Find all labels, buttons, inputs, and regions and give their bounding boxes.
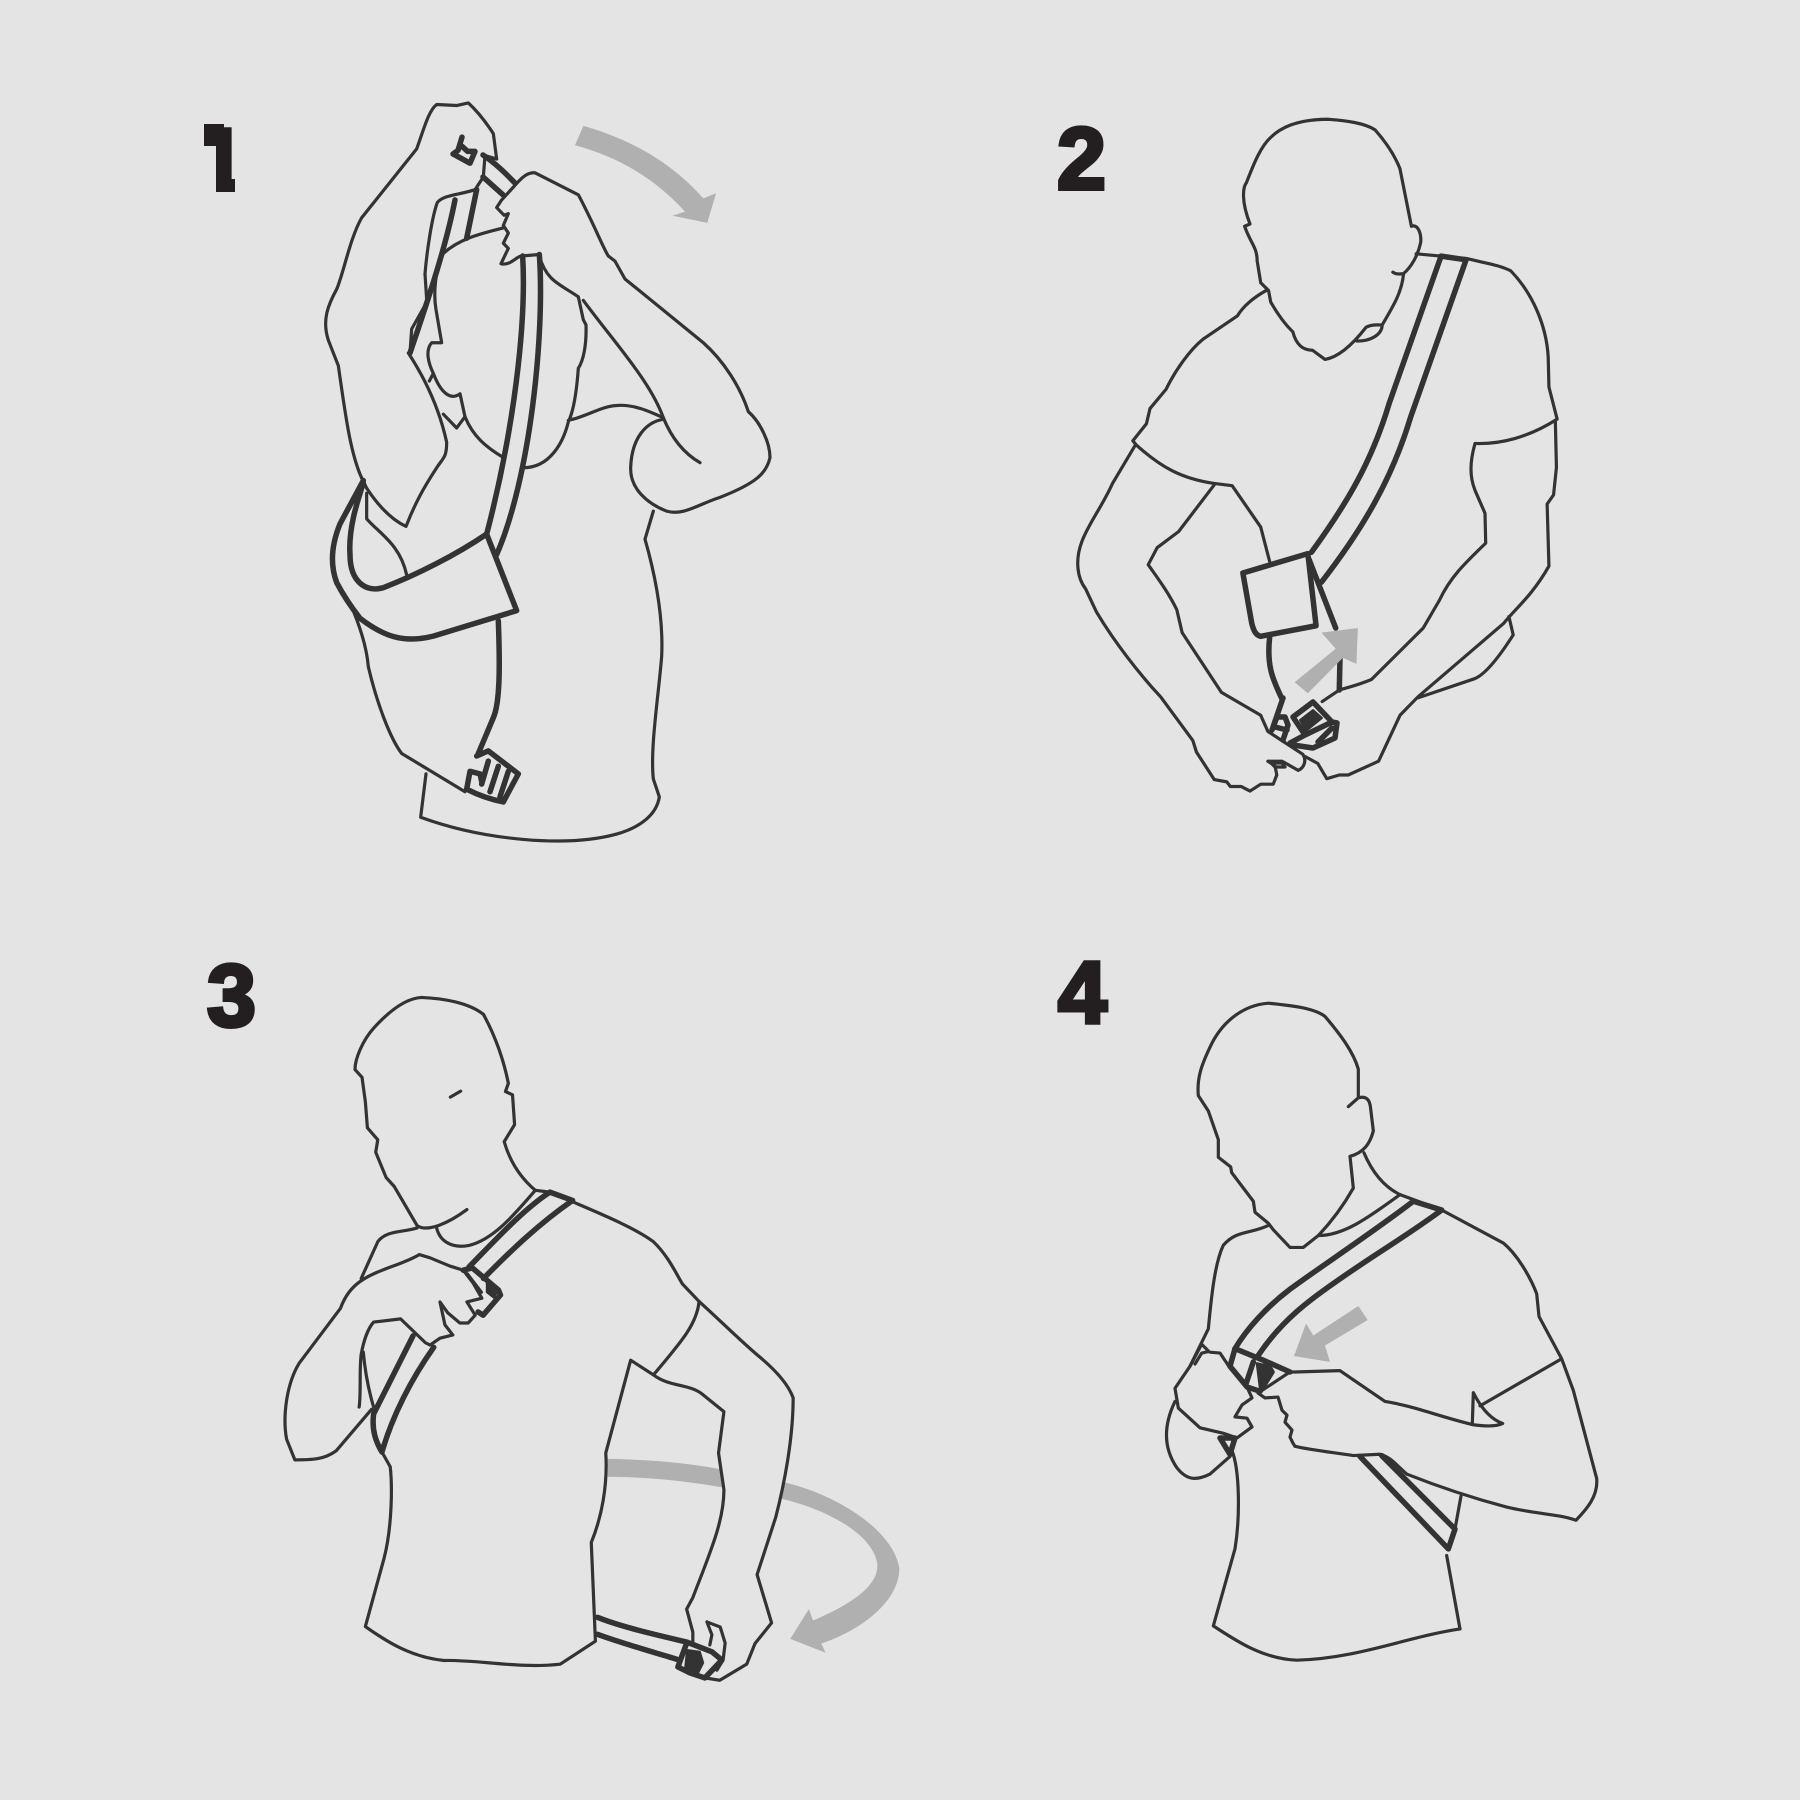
right shoulder and sleeve	[1322, 254, 1557, 702]
torso	[421, 511, 662, 841]
pouch	[1243, 554, 1316, 636]
panel: step 2 figure	[1078, 119, 1557, 791]
right arm and hand	[497, 173, 770, 512]
left arm and hand	[1078, 444, 1305, 791]
buckle at shoulder	[463, 1268, 500, 1315]
buckle	[1230, 1349, 1290, 1391]
buckle at hand	[678, 1642, 722, 1678]
shoulder and right arm outer	[573, 1202, 793, 1680]
head	[1198, 1003, 1373, 1247]
step number 2: 2	[1057, 109, 1106, 208]
arrow: up right	[1295, 628, 1358, 693]
strap end	[478, 621, 499, 753]
panel: step 4 figure	[1166, 1003, 1597, 1660]
panel: step 1 figure	[326, 103, 770, 841]
left arm and torso	[1166, 1401, 1460, 1660]
main strap	[487, 254, 541, 554]
arrow: down left	[1294, 1306, 1368, 1362]
lower strap	[1220, 1438, 1455, 1549]
fingers	[707, 1622, 725, 1670]
right arm lower	[1305, 421, 1556, 779]
strap between hands	[483, 155, 515, 195]
neck and collar	[361, 1190, 535, 1278]
lower strap	[597, 1617, 687, 1660]
left arm and hand	[326, 103, 497, 478]
shoulder and right arm	[1258, 1153, 1597, 1520]
arrow: curved right	[575, 126, 716, 223]
head	[355, 997, 535, 1226]
arrow: wrap around back	[608, 1459, 899, 1653]
left hand	[1175, 1344, 1252, 1438]
shoulder strap on arm	[410, 190, 477, 353]
left forearm inner	[362, 353, 447, 526]
back and lower arm lines	[350, 493, 465, 792]
head	[1244, 119, 1421, 359]
panel: step 3 figure	[285, 997, 899, 1680]
small buckle in hand	[453, 137, 475, 163]
head	[428, 228, 503, 458]
sleeve and torso	[365, 1301, 699, 1665]
strap	[373, 1192, 573, 1452]
collar and left shoulder	[1190, 1195, 1400, 1366]
buckle	[467, 751, 518, 802]
shoulder strap	[1311, 256, 1466, 582]
step number 1: 1	[197, 110, 246, 209]
step number 4: 4	[1058, 943, 1107, 1042]
neck and forearm underside	[523, 256, 663, 468]
lower strap	[1269, 559, 1340, 699]
step number 1	[185, 110, 259, 209]
strap	[1235, 1201, 1442, 1355]
step number 3: 3	[207, 946, 256, 1045]
right arm inner	[653, 1375, 724, 1644]
folded strap	[333, 481, 517, 639]
buckle in hands: step 2	[1271, 698, 1337, 767]
left arm and hand	[285, 1255, 482, 1460]
left shoulder and sleeve	[1133, 291, 1270, 561]
